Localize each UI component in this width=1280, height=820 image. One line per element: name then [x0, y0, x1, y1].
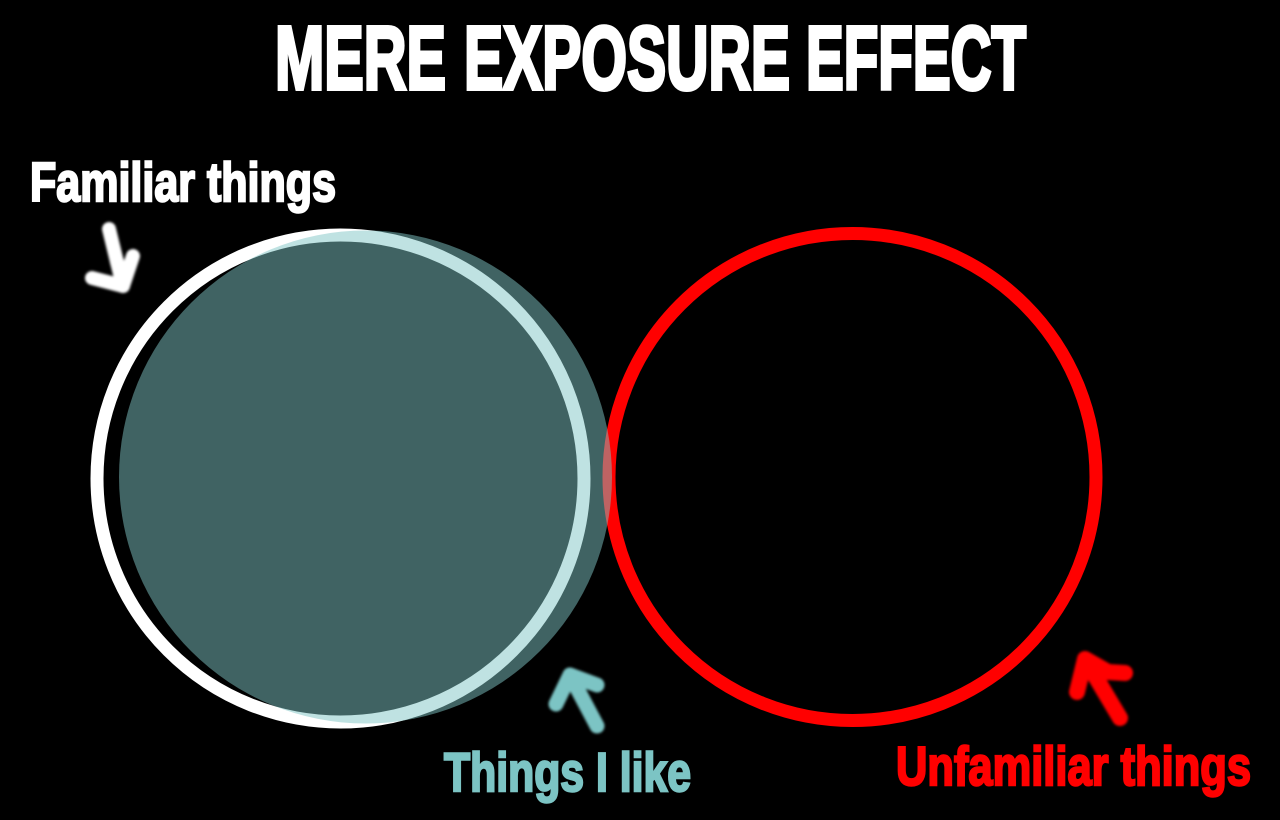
arrow: familiar things [92, 229, 133, 286]
label: things I like: Things I like [444, 741, 691, 803]
title: EFFECT [806, 9, 1026, 109]
arrow: unfamiliar things [1077, 659, 1125, 718]
title: MERE [275, 9, 446, 109]
title: EXPOSURE [464, 9, 790, 109]
circle: unfamiliar things [609, 234, 1096, 720]
label: familiar things: Familiar things [30, 151, 336, 213]
circle: things I like [119, 230, 612, 724]
circle: familiar things [97, 235, 584, 722]
title [275, 9, 1026, 109]
arrow: things I like [556, 675, 597, 726]
